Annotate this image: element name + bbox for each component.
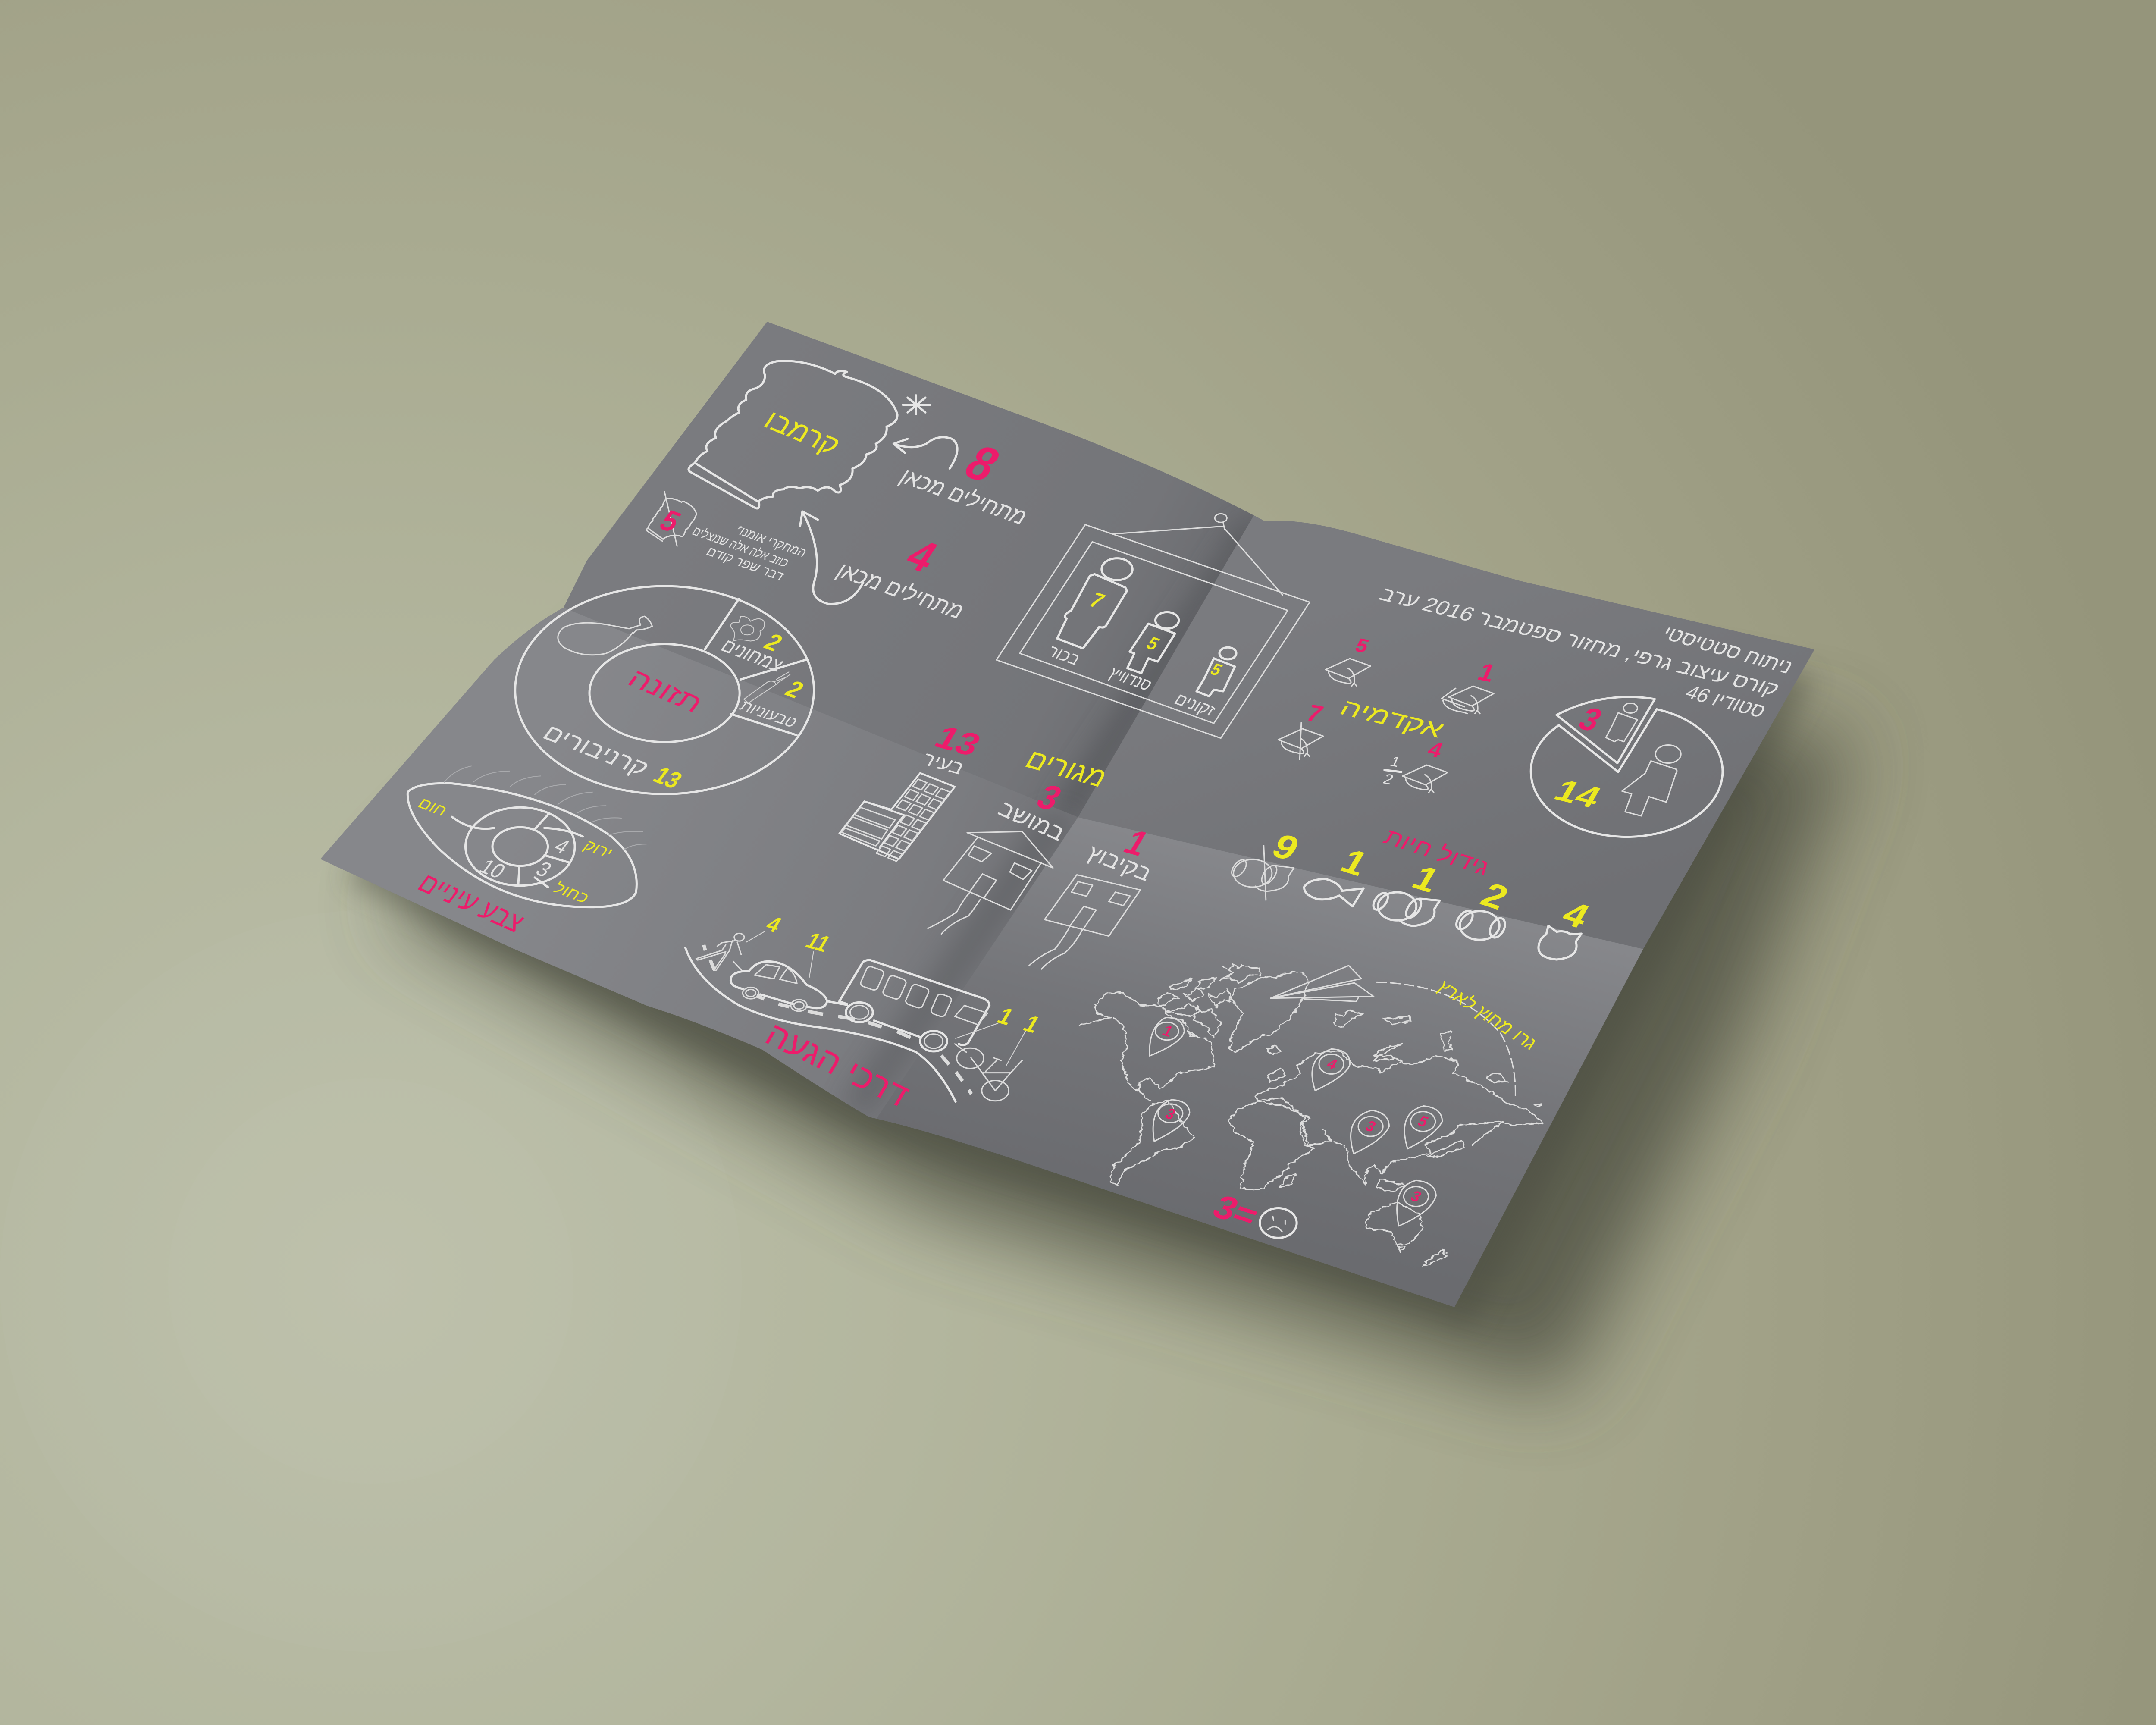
icon: bicycle <box>955 1044 1022 1101</box>
donut chart: nutrition <box>515 586 814 794</box>
dashed flight arc <box>1377 982 1515 1095</box>
icon: crossed dog and cat <box>1229 827 1306 900</box>
figure: youngest <box>1171 647 1236 719</box>
icon: crossed small jar <box>646 492 696 546</box>
number kibbutz: 1 <box>1117 823 1156 863</box>
label brown: חום <box>414 794 451 819</box>
icon: paper plane <box>1270 966 1374 1001</box>
label city: בעיר <box>918 748 968 778</box>
panel: housing and transport <box>685 719 1156 1114</box>
pin: China: 5 <box>1415 1113 1431 1130</box>
label carnivores: קרניבורים <box>538 719 655 781</box>
numbers and leaders: transport: 4 <box>762 912 786 937</box>
icon: dog and cat <box>1370 859 1446 926</box>
icon: pedestrian <box>696 933 744 972</box>
illustration: road <box>685 945 971 1102</box>
footnote <box>689 523 810 583</box>
pin: North America <box>1150 1018 1184 1056</box>
number vegetarians: 2 <box>759 629 788 656</box>
fraction one half: 1 <box>1388 753 1403 770</box>
number moshav: 3 <box>1030 778 1069 818</box>
icon: kremboo jar <box>689 361 897 508</box>
pin: India: 3 <box>1362 1118 1379 1135</box>
eye chart: eye colour: 4 <box>549 835 574 858</box>
pin: Europe <box>1312 1049 1350 1091</box>
label kibbutz: בקיבוץ <box>1083 840 1156 886</box>
eye chart: eye colour: 10 <box>475 855 510 883</box>
figure: eldest: בכור <box>1044 642 1084 668</box>
icon: half graduation cap 4 <box>1403 737 1448 793</box>
world map outline <box>1079 964 1543 1266</box>
arrow from four <box>800 511 863 604</box>
pin: South America <box>1153 1100 1190 1142</box>
pin: North America: 1 <box>1159 1022 1176 1040</box>
pin: China <box>1404 1106 1442 1149</box>
icon: crossed graduation cap 7 <box>1278 700 1327 759</box>
numbers and leaders: transport <box>746 912 1045 1066</box>
fraction one half: 2 <box>1381 771 1396 788</box>
label vegans: טבעוניות <box>736 697 801 731</box>
panel: nutrition and eye colour <box>407 586 814 938</box>
numbers and leaders: transport: 1 <box>1019 1010 1045 1038</box>
icon: crossed small jar: 5 <box>653 505 687 538</box>
icon: sad face <box>1260 1208 1297 1238</box>
icon: dog: 2 <box>1474 876 1515 917</box>
figure: eldest <box>1044 558 1132 668</box>
number vegans: 2 <box>780 676 809 703</box>
pin: South America: 3 <box>1162 1105 1178 1123</box>
pin: India <box>1351 1110 1389 1154</box>
icon: crossed dog and cat: 9 <box>1266 827 1306 868</box>
heading: academia: אקדמיה <box>1335 694 1449 742</box>
icon: graduation cap 5 <box>1326 634 1373 686</box>
fraction one half <box>1381 753 1403 788</box>
arrow from eight <box>893 437 957 468</box>
figure: middle: סנדוויץ <box>1105 664 1156 694</box>
icon: crossed graduation cap 7: 7 <box>1303 700 1327 728</box>
label nutrition centre: תזונה <box>622 663 709 718</box>
icon: chicken leg <box>558 616 652 655</box>
icon: fish <box>1304 842 1375 906</box>
icon: asterisk <box>903 395 930 414</box>
number city: 13 <box>928 719 987 762</box>
heading: ways to arrive: דרכי הגעה <box>759 1015 916 1114</box>
icon: half graduation cap 4: 4 <box>1424 737 1447 762</box>
icon: carrot <box>744 672 790 703</box>
label blue: כחול <box>550 879 593 906</box>
icon: two graduation caps 1: 1 <box>1474 658 1500 687</box>
pie chart: gender: 14 <box>1548 773 1608 815</box>
label: start here: מתחילים מכאן <box>895 464 1033 529</box>
title block: קורס עיצוב גרפי, מחזור ספטמבר 2016 ערב <box>1376 583 1784 700</box>
pie chart: gender: 3 <box>1572 701 1609 738</box>
paper sheet with folds <box>320 322 1814 1307</box>
figure: youngest: זקונים <box>1171 690 1219 719</box>
pin: Oceania <box>1397 1180 1436 1226</box>
equals three: 3= <box>1206 1188 1266 1235</box>
footnote: כוזב אלה אלה שמצלים <box>689 524 792 570</box>
picture frame: birth order <box>997 514 1310 738</box>
icon: fried egg <box>731 616 765 641</box>
numbers and leaders: transport: 1 <box>993 1003 1018 1030</box>
panel: prior knowledge, jar and family order <box>646 361 1310 738</box>
jar label: קרמבו <box>758 404 846 460</box>
icon: dog <box>1453 876 1515 940</box>
label along arc: גרו מחוץ לארץ <box>1432 977 1542 1054</box>
footnote: *המחקרי אומנו <box>732 523 810 560</box>
numbers and leaders: transport: 11 <box>801 928 835 957</box>
heading: housing: מגורים <box>1020 744 1113 793</box>
eyelashes <box>444 766 646 850</box>
panel: title, gender and academia <box>1278 583 1798 837</box>
pie chart: gender <box>1531 697 1723 837</box>
title block: ניתוח סטטיסטי <box>1658 621 1798 678</box>
icon: car <box>730 961 827 1011</box>
figure: youngest: 5 <box>1206 660 1225 680</box>
figure: middle <box>1105 612 1179 694</box>
panel: world map <box>1079 964 1543 1266</box>
label vegetarians: צמחונים <box>717 635 788 675</box>
icon: cat <box>1539 894 1596 960</box>
eye chart: eye colour <box>407 783 636 907</box>
label green: ירוק <box>580 837 617 861</box>
pin: Oceania: 3 <box>1408 1188 1424 1205</box>
number carnivores: 13 <box>648 762 687 794</box>
number 4: 4 <box>897 531 946 581</box>
heading: pets: גידול חיות <box>1379 824 1495 880</box>
icon: bus <box>828 960 990 1051</box>
icon: two graduation caps 1 <box>1442 658 1500 714</box>
icon: city buildings <box>839 773 955 861</box>
label: start here 2: מתחילים מכאן <box>832 558 969 624</box>
icon: moshav house <box>928 831 1053 934</box>
label moshav: במושב <box>994 796 1069 846</box>
panel: pets <box>1229 824 1596 960</box>
icon: kibbutz house <box>1029 875 1141 969</box>
eye chart: eye colour: 3 <box>531 858 556 881</box>
icon: graduation cap 5: 5 <box>1352 634 1373 657</box>
paper drop shadow <box>345 431 1854 1393</box>
title block: סטודיו 46 <box>1682 681 1771 722</box>
heading: eye colour: צבע עיניים <box>412 868 531 938</box>
number 8: 8 <box>955 436 1010 492</box>
icon: cat: 4 <box>1555 894 1596 935</box>
pin: Europe: 4 <box>1324 1055 1341 1073</box>
icon: dog and cat: 1 <box>1406 859 1446 900</box>
footnote: דבר שפר קודם <box>704 544 787 583</box>
figure: eldest: 7 <box>1085 588 1109 613</box>
icon: fish: 1 <box>1334 842 1375 883</box>
figure: middle: 5 <box>1143 633 1163 654</box>
